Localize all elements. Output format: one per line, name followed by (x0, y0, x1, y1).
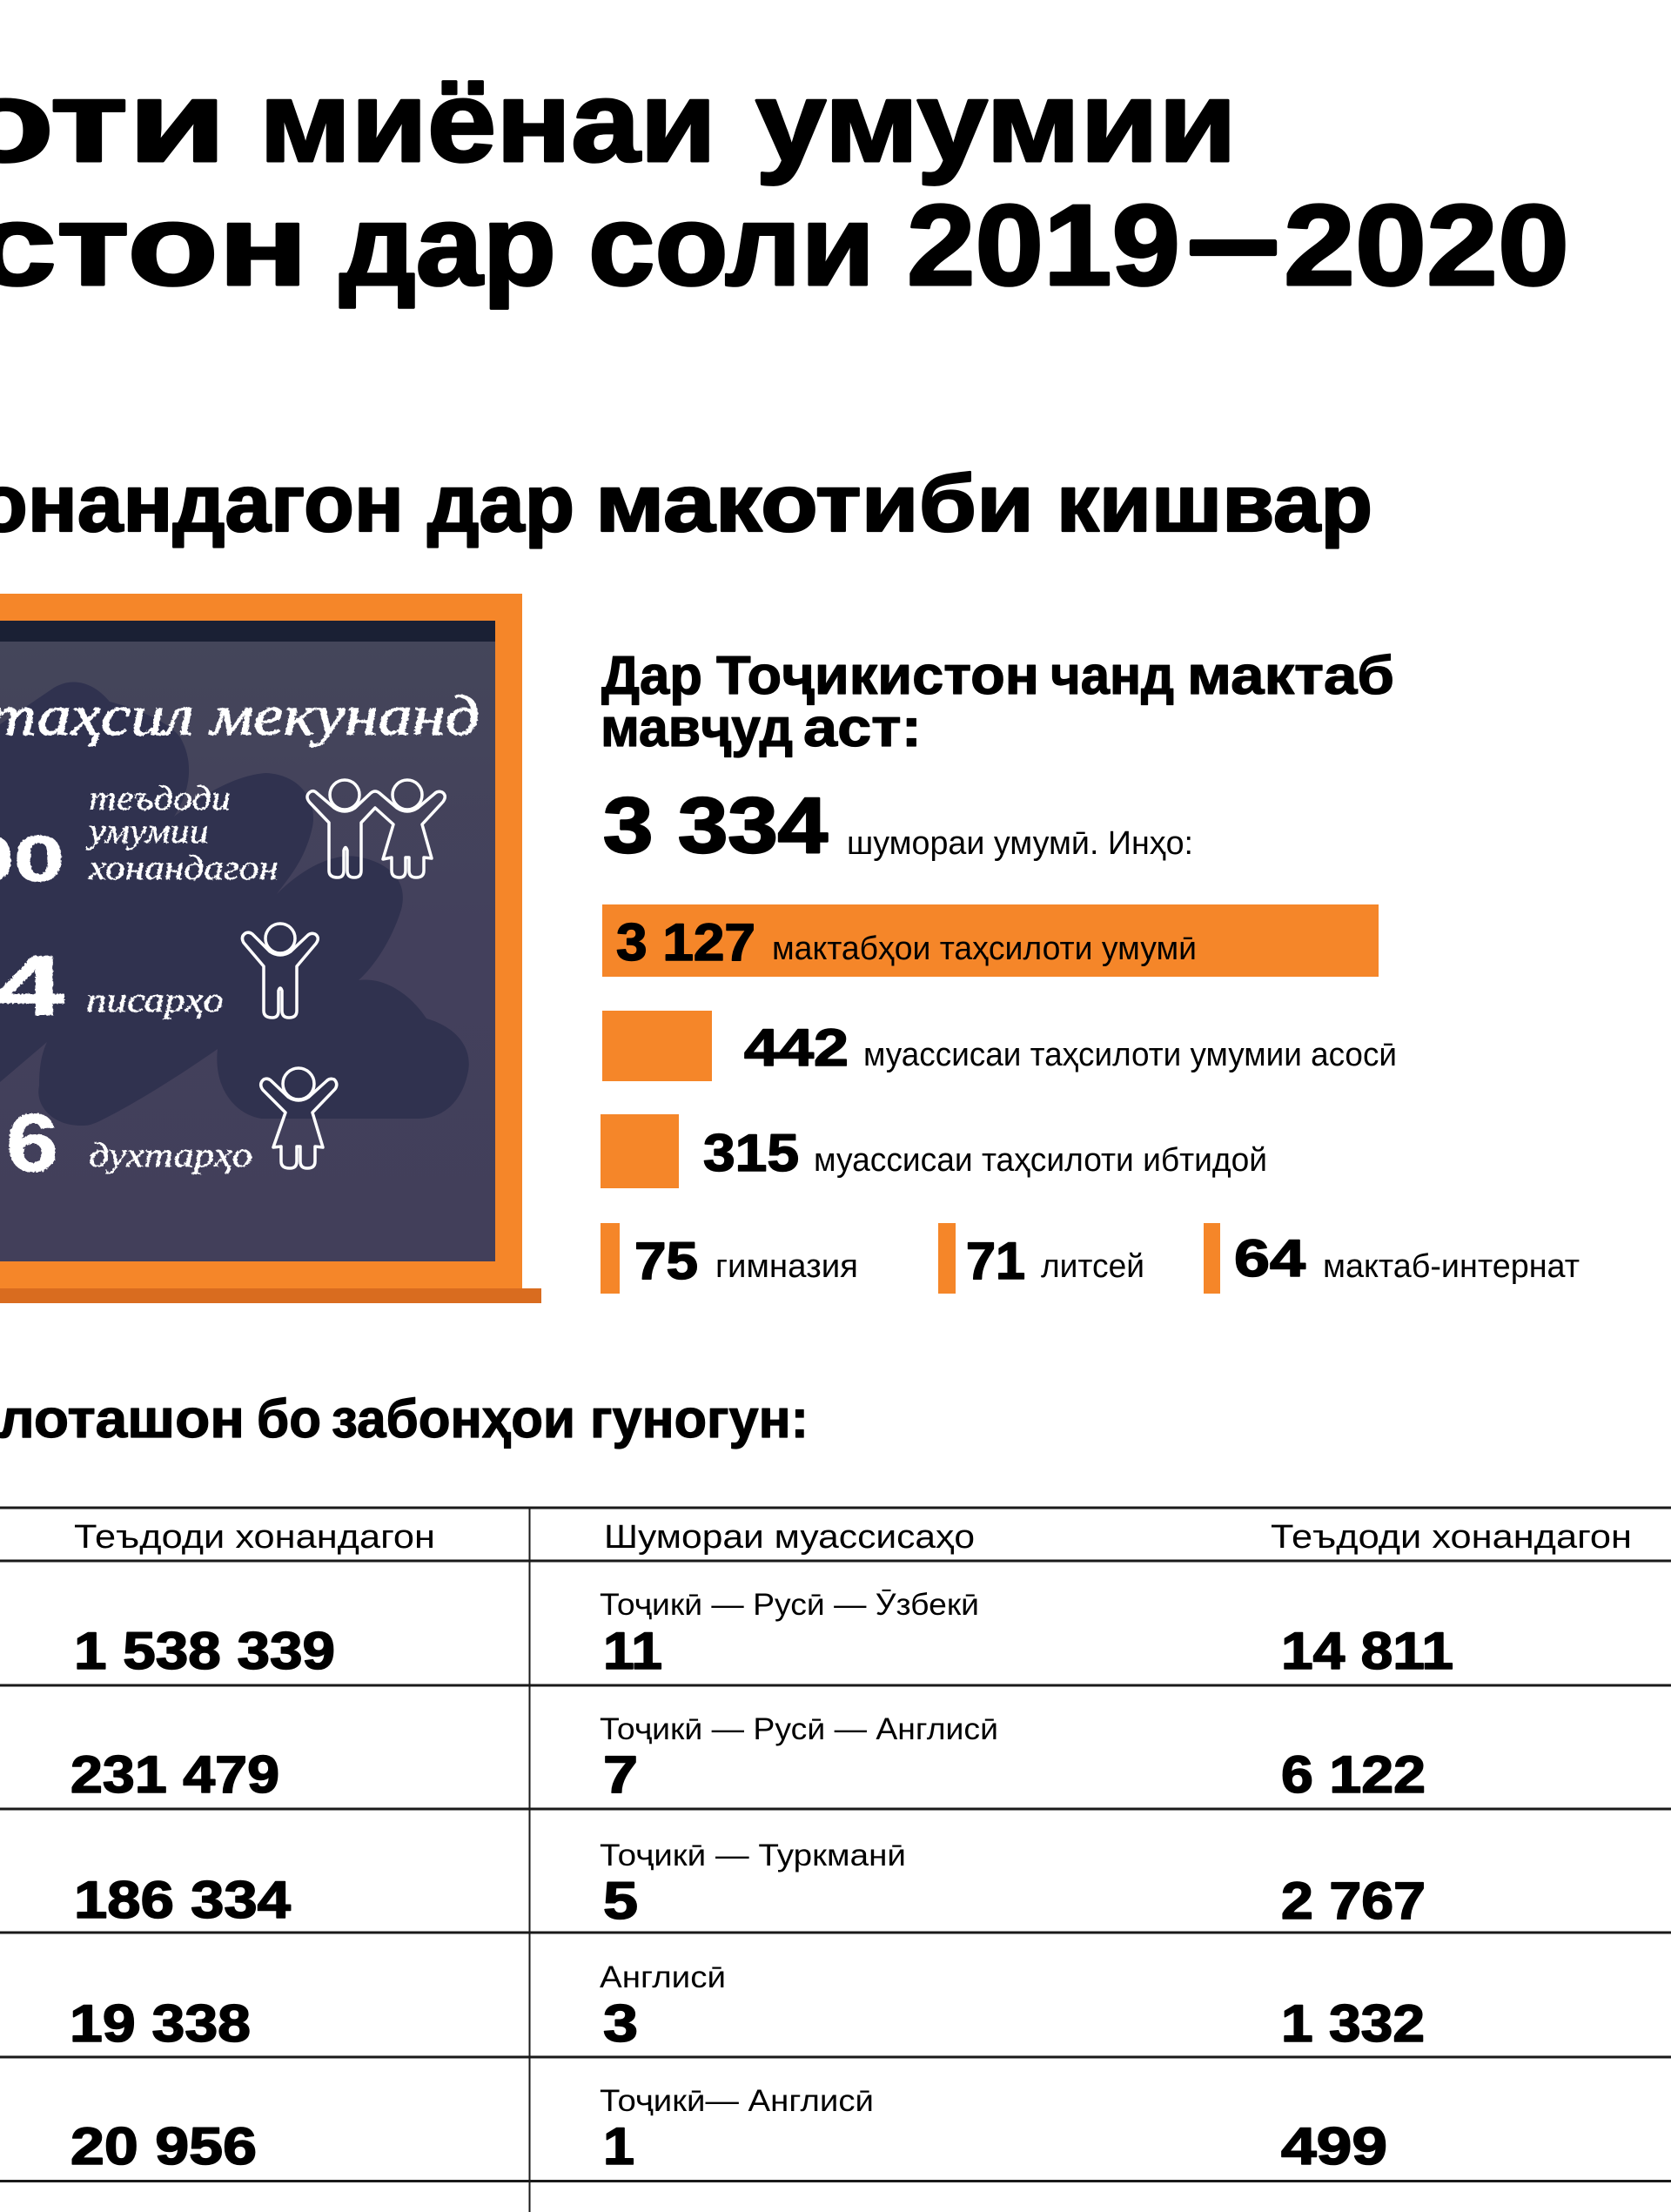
heading: languages of instruction: лоташон (0, 1389, 245, 1449)
title: 2019 (907, 181, 1180, 309)
heading: how many schools: мактаб (1187, 646, 1394, 706)
heading: languages of instruction: гуногун: (590, 1389, 809, 1449)
table header: Теъдоди хонандагон (74, 1519, 435, 1556)
title: дар (339, 181, 556, 309)
row 4: Англисӣ (600, 1960, 726, 1994)
table header: Шумораи муассисаҳо (604, 1519, 975, 1556)
bar: boarding schools (1204, 1223, 1580, 1294)
row 3: 5 (603, 1872, 638, 1930)
bar: lyceums (938, 1223, 1144, 1294)
section heading: students in schools: дар (427, 458, 574, 548)
title: миёнаи (259, 57, 716, 185)
title (0, 57, 1569, 309)
stat: total students: хонандагон (88, 848, 278, 887)
table: schools by language (0, 1508, 1671, 2212)
heading: how many schools: мавҷуд (601, 698, 793, 758)
stat: girls (6, 1097, 252, 1188)
board surface (0, 621, 495, 1261)
panel: school counts (601, 646, 1580, 1294)
stat: total students (0, 778, 278, 895)
row 3: 2 767 (1281, 1872, 1426, 1930)
bar: boarding schools: 64 (1234, 1229, 1306, 1288)
board tray (0, 1288, 541, 1303)
total schools (603, 783, 1193, 870)
bar: basic schools: 442 (744, 1019, 849, 1077)
section heading: students in schools: макотиби (595, 458, 1034, 548)
table header: Теъдоди хонандагон (1271, 1519, 1632, 1556)
row 3: Тоҷикӣ — Туркманӣ (600, 1839, 906, 1872)
chalk heading: таҳсил мекунанд (0, 684, 480, 748)
bar: gymnasiums: гимназия (715, 1248, 858, 1285)
table header (74, 1519, 1632, 1556)
title: 2020 (1284, 181, 1569, 309)
bar: general schools (602, 904, 1379, 977)
section heading: students in schools (0, 458, 1372, 548)
stat: girls: духтарҳо (89, 1135, 252, 1174)
stat: boys: писарҳо (86, 980, 224, 1019)
row 1 (74, 1588, 1453, 1680)
icon: boy and girl (307, 780, 445, 877)
row 4: 19 338 (70, 1994, 251, 2053)
row 2: 6 122 (1281, 1745, 1426, 1804)
stat: total students: теъдоди (89, 778, 231, 817)
title: — (1191, 175, 1275, 303)
bar: basic schools: муассисаи таҳсилоти умумии асосӣ (863, 1037, 1397, 1073)
heading: languages of instruction: бо (257, 1389, 321, 1449)
row 1: 11 (603, 1622, 662, 1680)
heading: how many schools (601, 646, 1394, 758)
chalk smudge (0, 682, 469, 1126)
heading: how many schools: чанд (1050, 646, 1174, 706)
panel: chalkboard (0, 594, 541, 1303)
row 5 (70, 2084, 1387, 2175)
board frame (0, 594, 522, 1288)
table rules (0, 1508, 1671, 2212)
row 1: 14 811 (1281, 1622, 1453, 1680)
bar: general schools: 3 127 (616, 913, 755, 972)
row 3: 186 334 (74, 1871, 292, 1929)
row 2: 231 479 (70, 1745, 279, 1804)
row 4: 3 (603, 1994, 638, 2053)
title: умумии (755, 57, 1237, 185)
heading: how many schools: аст: (803, 698, 922, 758)
row 4 (70, 1960, 1425, 2053)
stat: total students: умумии (85, 811, 209, 851)
heading: languages of instruction: забонҳои (332, 1389, 575, 1449)
total schools: шумораи умумӣ. Инҳо: (847, 825, 1193, 862)
icon: girl (261, 1068, 337, 1168)
bar: primary schools: 315 (703, 1124, 799, 1182)
bar: primary schools (601, 1114, 1267, 1188)
title: соли (588, 181, 875, 309)
bar: gymnasiums (601, 1223, 858, 1294)
heading: languages of instruction (0, 1389, 809, 1449)
bar: lyceums: литсей (1041, 1248, 1144, 1285)
board top shadow strip (0, 621, 495, 642)
bar: general schools: мактабҳои таҳсилоти умумӣ (772, 931, 1197, 967)
stat: girls: 6 (6, 1097, 58, 1188)
total schools: 3 334 (603, 783, 828, 870)
bar: boarding schools: мактаб-интернат (1323, 1248, 1580, 1285)
row 5: Тоҷикӣ— Англисӣ (600, 2084, 874, 2118)
row 1: 1 538 339 (74, 1622, 335, 1680)
bar: gymnasiums: 75 (634, 1232, 698, 1290)
row 2: 7 (603, 1745, 638, 1804)
row 2: Тоҷикӣ — Русӣ — Англисӣ (600, 1712, 998, 1746)
icon: boy (242, 924, 318, 1018)
row 3 (74, 1839, 1426, 1930)
heading: how many schools: Дар (601, 646, 702, 706)
heading: how many schools: Тоҷикистон (716, 646, 1039, 706)
row 2 (70, 1712, 1426, 1804)
bar: basic schools (602, 1011, 1397, 1081)
bar: lyceums: 71 (966, 1232, 1025, 1290)
row 5: 499 (1281, 2117, 1387, 2175)
row 5: 20 956 (70, 2117, 257, 2175)
stat: boys (0, 938, 224, 1033)
section heading: students in schools: кишвар (1057, 458, 1372, 548)
bar: primary schools: муассисаи таҳсилоти ибтидой (814, 1142, 1267, 1179)
row 4: 1 332 (1281, 1994, 1425, 2053)
row 1: Тоҷикӣ — Русӣ — Ӯзбекӣ (600, 1588, 979, 1622)
row 5: 1 (603, 2117, 634, 2175)
